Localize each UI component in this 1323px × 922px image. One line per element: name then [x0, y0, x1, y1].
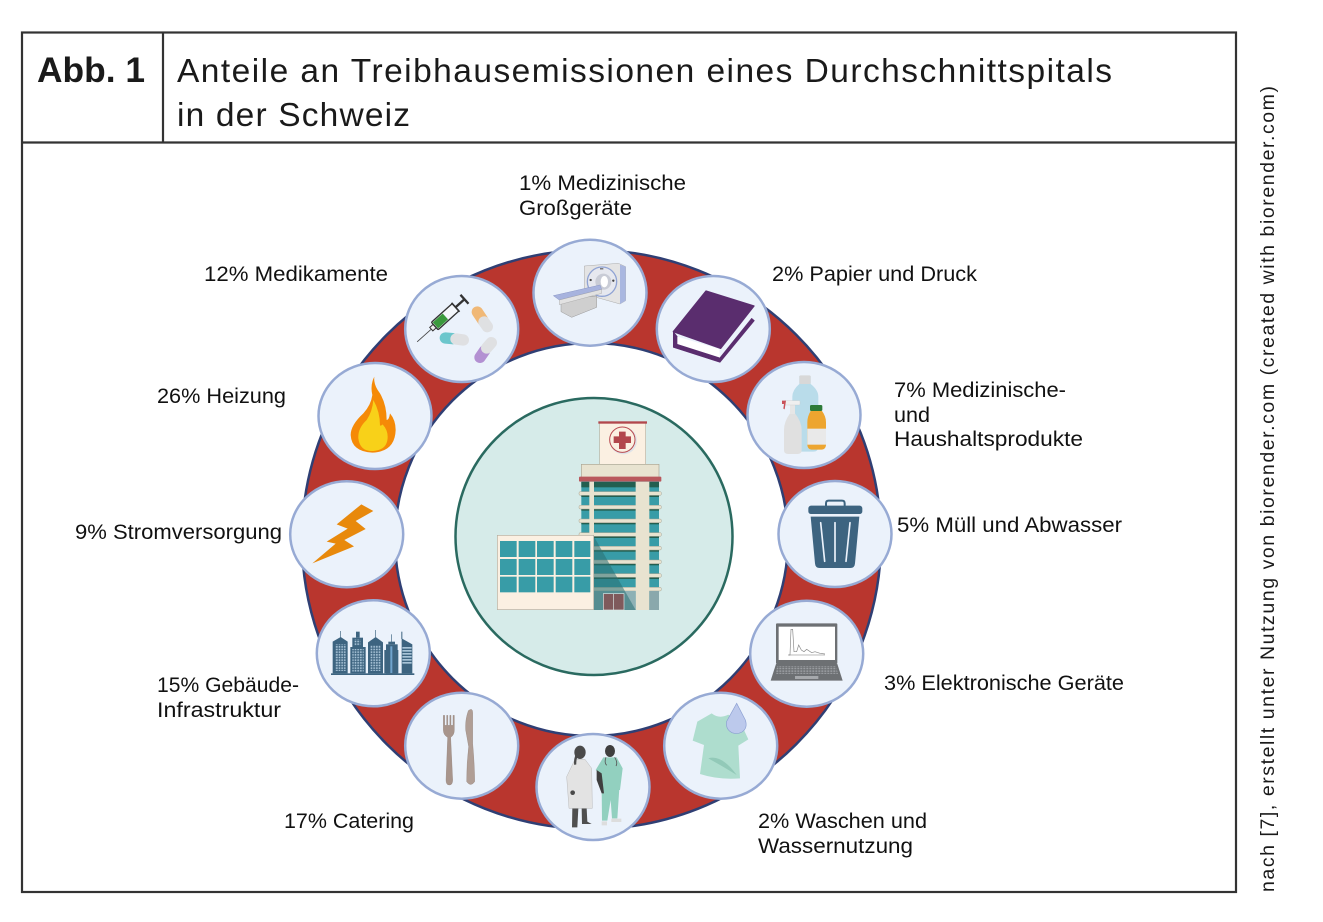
node: medication: [405, 276, 518, 382]
label: medical and household products: [894, 379, 1083, 451]
node: medical and household products: [748, 362, 860, 468]
node: medical large equipment: [534, 240, 646, 346]
icon: city skyline: [331, 630, 414, 675]
icon: syringe and capsules: [413, 295, 491, 357]
label: medical and household products: und: [894, 404, 930, 427]
icon: flame: [351, 377, 396, 453]
label: medical and household products: 7% Medizinische-: [894, 379, 1066, 402]
label: medical and household products: Haushaltsprodukte: [894, 428, 1083, 451]
label: medical large equipment: 1% Medizinische: [519, 172, 686, 195]
label: electricity: 9% Stromversorgung: [75, 521, 282, 544]
figure number: Abb. 1: [37, 51, 145, 90]
label: catering: 17% Catering: [284, 810, 414, 833]
node: washing and water use: [664, 693, 777, 799]
label: washing and water use: [758, 810, 927, 858]
label: building infrastructure: Infrastruktur: [157, 699, 281, 722]
title: in der Schweiz: [177, 97, 410, 134]
icon: shirt with drop: [693, 703, 748, 779]
icon: hospital building: [497, 421, 661, 610]
node: waste and waste water: [778, 481, 892, 587]
icon: CT scanner: [553, 263, 626, 317]
node: staff: [536, 734, 650, 840]
title: Anteile an Treibhausemissionen eines Durchschnittspitals: [177, 53, 1112, 90]
label: waste and waste water: 5% Müll und Abwasser: [897, 514, 1122, 537]
node: electricity: [290, 481, 403, 587]
red emissions ring: [302, 250, 881, 829]
icon: trash can: [808, 501, 862, 568]
label: medical large equipment: Großgeräte: [519, 197, 632, 220]
icon: fork and knife: [443, 709, 475, 785]
label: medical large equipment: [519, 172, 686, 220]
node: electronic devices: [750, 601, 863, 707]
title: [177, 53, 1112, 134]
label: heating: 26% Heizung: [157, 385, 286, 408]
icon: two clinicians: [567, 745, 623, 827]
node: heating: [318, 363, 432, 469]
label: paper and print: 2% Papier und Druck: [772, 263, 978, 286]
label: washing and water use: 2% Waschen und: [758, 810, 927, 833]
source note: nach [7], erstellt unter Nutzung von biorender.com (created with biorender.com): [1257, 86, 1279, 892]
label: medication: 12% Medikamente: [204, 263, 388, 286]
icon: book: [673, 291, 754, 362]
node: building infrastructure: [317, 600, 430, 706]
icon: lightning bolt: [312, 504, 373, 563]
label: washing and water use: Wassernutzung: [758, 835, 913, 858]
label: building infrastructure: 15% Gebäude-: [157, 674, 299, 697]
icon: bottles: [782, 375, 826, 454]
central hospital circle: [456, 398, 732, 675]
label: electronic devices: 3% Elektronische Geräte: [884, 672, 1124, 695]
icon: laptop: [771, 623, 843, 681]
node: catering: [405, 693, 518, 799]
node: paper and print: [657, 276, 770, 382]
label: building infrastructure: [157, 674, 299, 722]
